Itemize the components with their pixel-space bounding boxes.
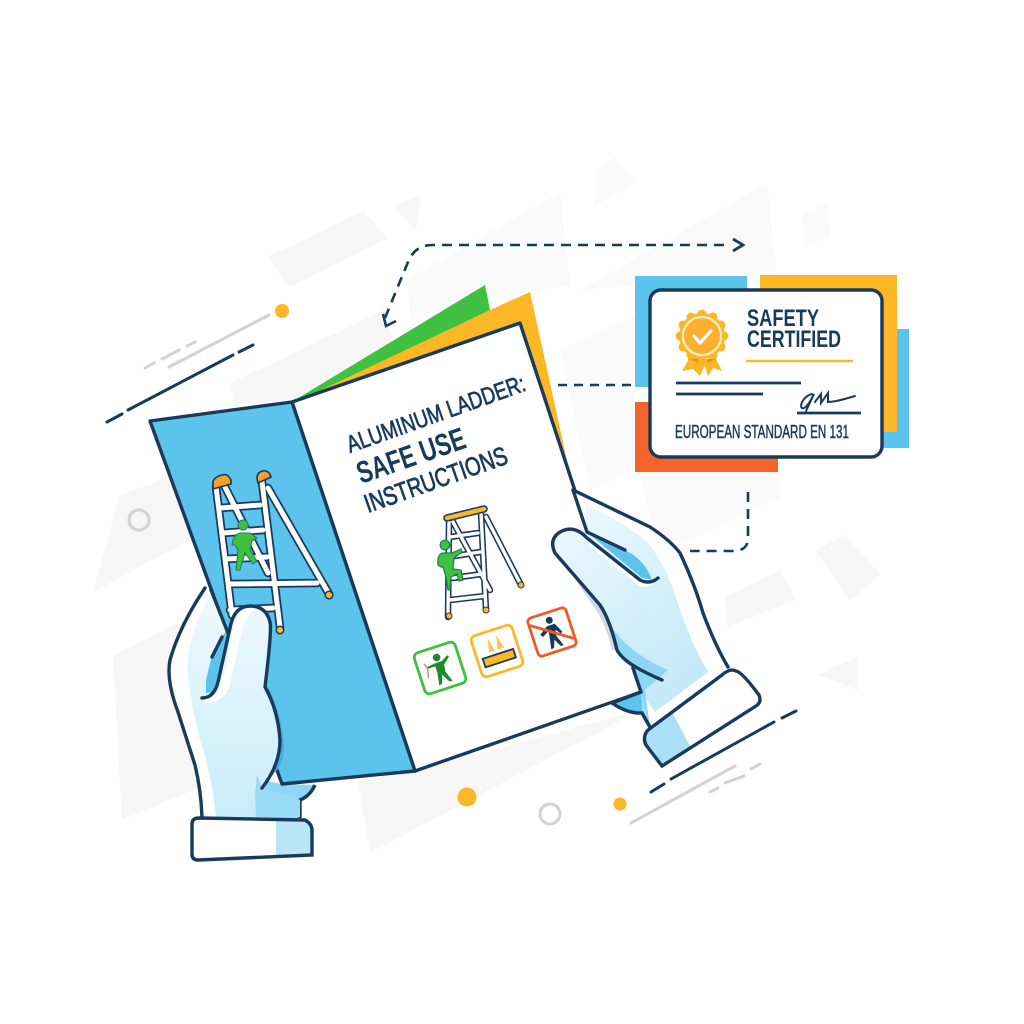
- certificate card: [635, 275, 909, 472]
- certificate face: [650, 290, 882, 457]
- certificate colour backing: blue: [635, 276, 747, 387]
- yellow dot upper left: [275, 304, 289, 318]
- ladder on page: [438, 509, 524, 619]
- booklet title: INSTRUCTIONS: [360, 440, 511, 519]
- yellow rule: [746, 360, 853, 362]
- back page: yellow: [300, 292, 568, 465]
- left wrist mid-blue shading: [255, 775, 300, 817]
- left hand wrist behind booklet: [240, 780, 315, 818]
- certificate colour backing: right blue: [870, 329, 909, 448]
- left cuff: [192, 818, 312, 860]
- booklet title: ALUMINUM LADDER:: [343, 370, 529, 459]
- right hand back and wrist: [612, 660, 690, 727]
- left hand outlines: [169, 588, 280, 817]
- standard label: EUROPEAN STANDARD EN 131: [675, 422, 849, 442]
- yellow dot bottom: [458, 788, 476, 806]
- booklet right page: [292, 323, 641, 771]
- left hand: [169, 588, 312, 860]
- right hand glove: [553, 490, 728, 727]
- background geometric shapes: upper, fainter: [407, 157, 831, 545]
- certificate heading: CERTIFIED: [747, 326, 841, 353]
- booklet title: SAFE USE: [352, 421, 470, 491]
- safety icon: green: [413, 641, 467, 695]
- safety icon: red prohibition: [527, 607, 577, 657]
- certificate colour backing: orange: [635, 402, 778, 472]
- certificate heading: [747, 305, 841, 353]
- back page: green: [295, 285, 490, 400]
- white highlight under gap: [588, 540, 656, 587]
- signature: [797, 393, 861, 413]
- blue gap between thumb and palm: [206, 625, 230, 693]
- blue palm shading: [602, 610, 668, 727]
- left hand glove: [169, 588, 300, 817]
- thumb white highlight: [202, 606, 258, 703]
- icon: award seal: [676, 310, 728, 376]
- booklet left cover: [150, 402, 415, 784]
- dashed connector certificate to hand: [690, 492, 748, 551]
- right hand: [552, 490, 760, 766]
- green climber on page: [438, 540, 463, 590]
- finger drop shadow: [552, 530, 617, 650]
- left hand pale shading: [187, 597, 300, 817]
- decorative lines lower right: [631, 711, 796, 823]
- dashed arrow to certificate: [383, 239, 743, 326]
- grey ring bottom: [540, 804, 560, 824]
- booklet: [150, 285, 641, 784]
- grey ring left: [129, 510, 149, 530]
- right hand pale shading: [553, 505, 708, 712]
- right hand outlines: [553, 490, 728, 727]
- booklet title: [343, 370, 529, 519]
- safety icon: yellow: [470, 624, 524, 678]
- text placeholder lines: [676, 383, 801, 394]
- blue gap between fingers: [587, 532, 652, 580]
- background geometric shapes: lower, stronger: [93, 193, 880, 853]
- dashed connector booklet to certificate: [558, 384, 640, 386]
- decorative lines upper left: [107, 315, 269, 422]
- certificate heading: SAFETY: [747, 305, 819, 332]
- shadow of hand on cover: [262, 687, 284, 788]
- right cuff: [644, 670, 760, 766]
- small yellow dot bottom: [614, 798, 626, 810]
- green climber on cover: [232, 520, 257, 570]
- ladder on cover: [213, 471, 333, 634]
- certificate colour backing: yellow: [760, 275, 897, 432]
